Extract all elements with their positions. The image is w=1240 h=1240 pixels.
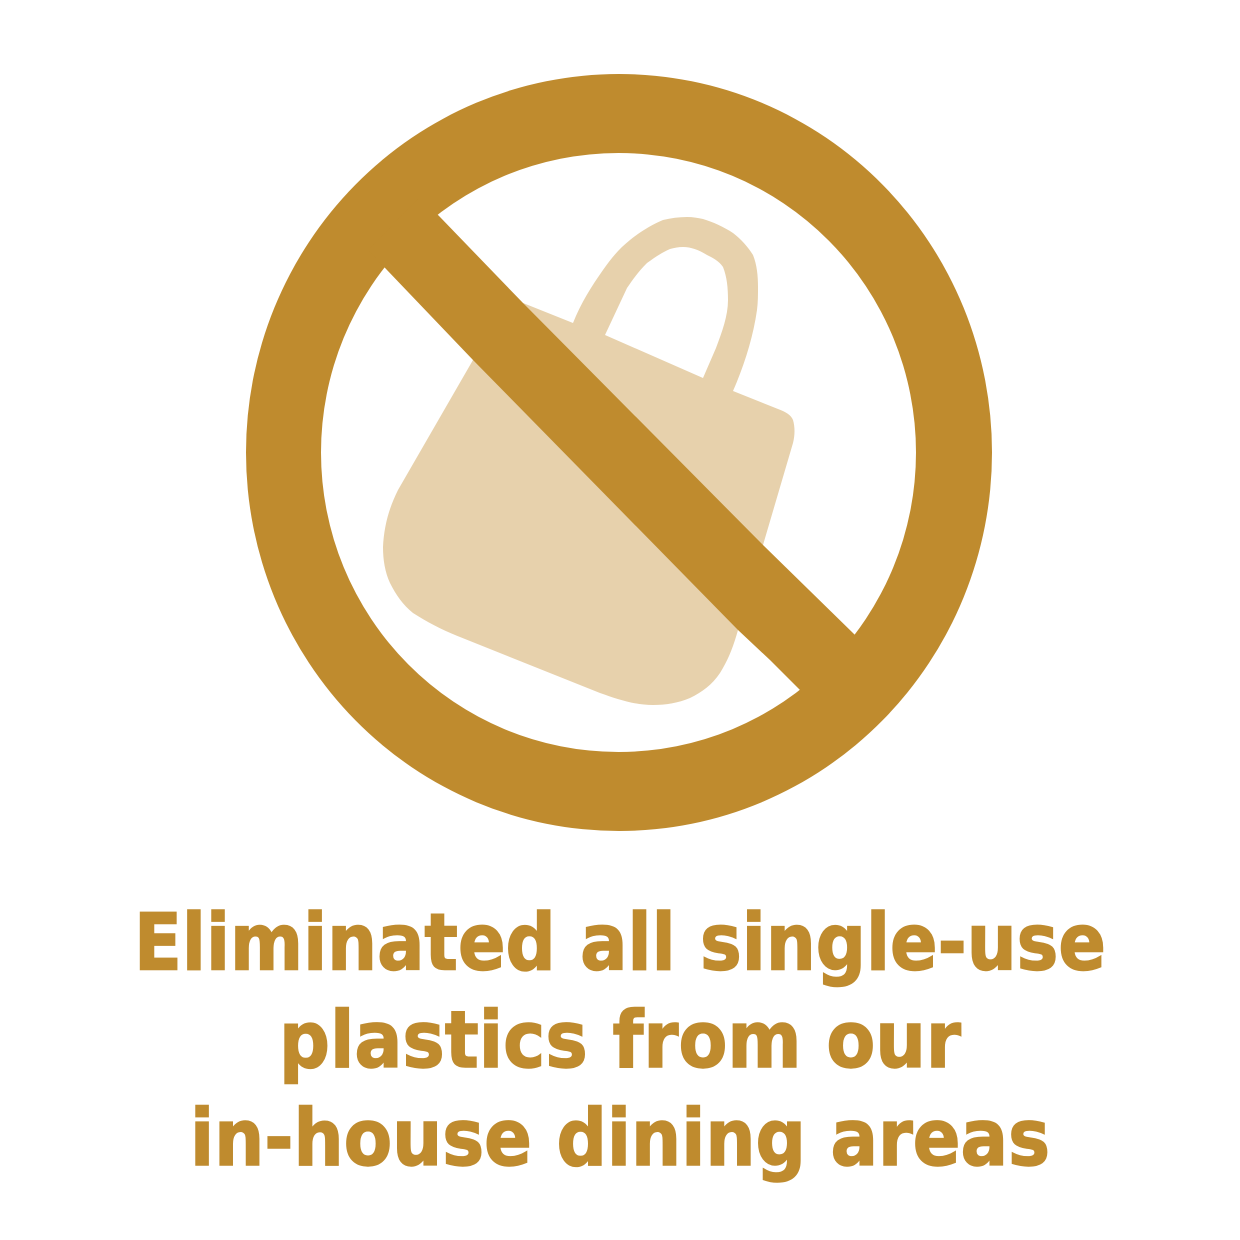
icon: prohibition bar <box>368 197 875 710</box>
title: in-house dining areas <box>190 1094 1050 1184</box>
icon: prohibition ring <box>246 74 992 831</box>
icon: shopping bag <box>383 217 794 705</box>
title: plastics from our <box>279 996 961 1086</box>
title: Eliminated all single-use <box>134 898 1106 988</box>
icon: no plastic bag <box>246 74 992 831</box>
title <box>134 898 1106 1184</box>
